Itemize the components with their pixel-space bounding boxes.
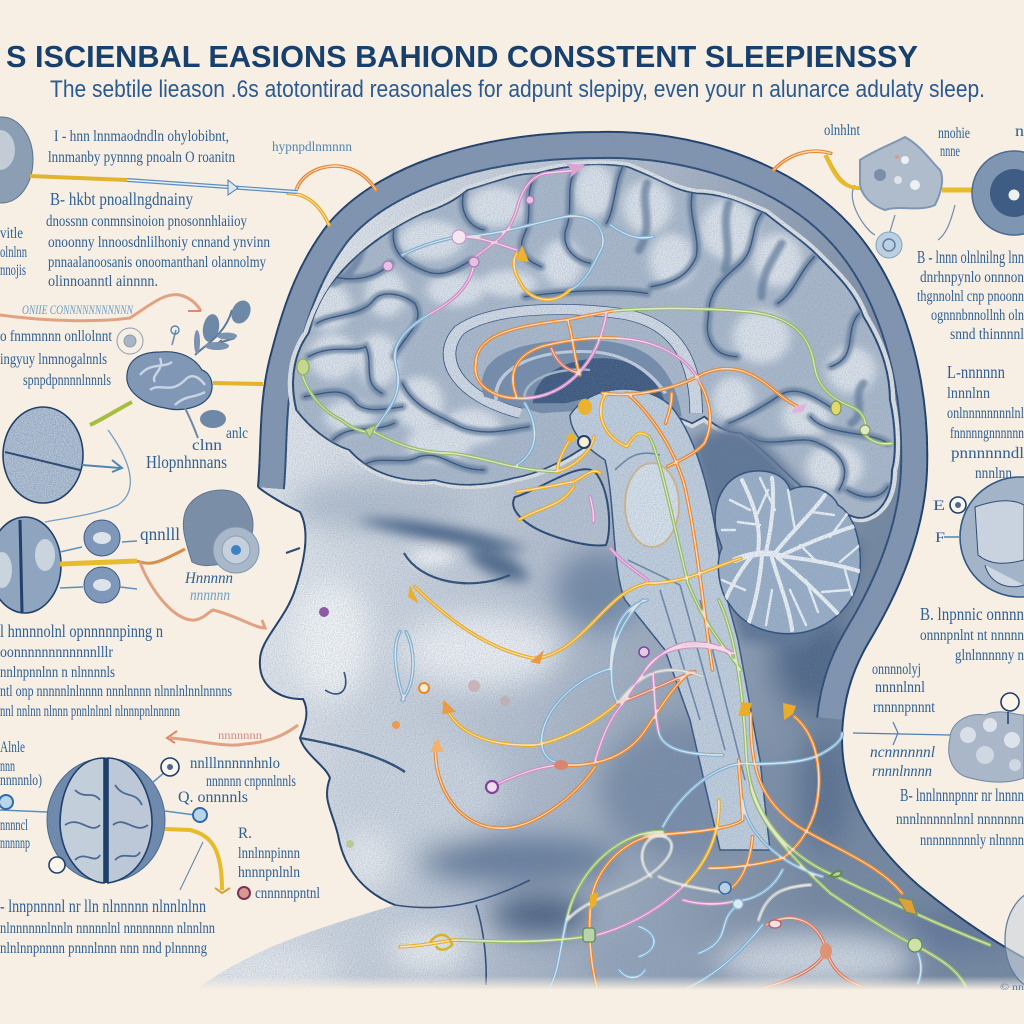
temporal lobe (513, 469, 609, 545)
icon: split brain (0, 517, 61, 613)
nerves within the brain (288, 151, 892, 670)
text block: neck label upper (872, 661, 935, 716)
text block: note B (46, 189, 270, 290)
text block: lower-left note (0, 621, 232, 720)
text block: left edge note: olnlnn (0, 244, 27, 261)
text block: brain caption right: nnnnnn cnpnnlnnls (206, 773, 296, 790)
connector lines to small brain (90, 383, 263, 425)
icon: lumpy brain specimen (949, 693, 1024, 782)
text block: bottom-left note: nlnlnnpnnnn pnnnlnnn nnn nnd plnnnng (0, 940, 207, 957)
icon: top-view brain in circle (0, 758, 195, 883)
head silhouette (195, 132, 1024, 990)
text block: right note L: lnnnlnn (947, 385, 990, 402)
label: rock specimen caption (140, 524, 233, 604)
label: rock specimen caption: nnnnnn (190, 587, 230, 604)
text block: lower-left note: nnl nnlnn nlnnn pnnlnlnnl nlnnnpnlnnnnn (0, 703, 180, 720)
yellow arrow to marker (165, 829, 250, 899)
label: specimen caption (938, 123, 1024, 160)
small corner mark: © nn (1000, 982, 1024, 992)
text block: far-left labels: nnnncl (0, 817, 28, 834)
salmon arrow with caption (167, 725, 298, 745)
callout markers: E and F: E (933, 498, 945, 514)
head anatomy illustration (190, 120, 1024, 1000)
label: specimen caption: n (1015, 123, 1024, 140)
text block: left edge note: vitle (0, 225, 23, 242)
text block: bottom-left note (0, 896, 215, 957)
top-left specimen and connector (0, 117, 297, 203)
label: rock specimen caption: qnnlll (140, 524, 180, 544)
jawline and facial features (286, 548, 530, 985)
text block: right note B lower (920, 604, 1024, 664)
label: specimen caption: nnohie (938, 125, 970, 142)
text block: far-left labels (0, 739, 42, 852)
central cavity (482, 340, 682, 417)
pointer line with chevron (853, 722, 950, 745)
brain folds (304, 167, 888, 497)
text block: note B: onoonny lnnoosdnlilhoniy cnnand ynvinn (48, 234, 270, 251)
stipple texture across head (190, 120, 1024, 1000)
text block: neck label lower: ncnnnnnnl (870, 744, 936, 761)
salmon arrow with caption (0, 295, 201, 321)
title: S ISCIENBAL EASIONS BAHIOND CONSSTENT SLEEPIENSSY (6, 39, 918, 74)
label: hypnotalamus: hypnpdlnmnnn (272, 140, 352, 155)
text block: lower-left note: ntl onp nnnnnlnlnnnn nnnlnnnn nlnnlnlnnlnnnns (0, 683, 232, 700)
icon: irregular tissue specimen (852, 137, 955, 258)
text block: right note B (917, 247, 1024, 343)
icon: faint bottom-right circle (1005, 890, 1024, 990)
corpus callosum band (450, 309, 696, 413)
text block: brain caption right: nnlllnnnnnhnlo (190, 755, 280, 772)
text block: neck label upper: onnnnolyj (872, 661, 921, 678)
callout markers: E and F (933, 497, 966, 546)
text block: right note L: nnnlnn (975, 465, 1012, 482)
text block: neck label upper: nnnnlnnl (875, 679, 925, 696)
text block: neck label lower: rnnnlnnnn (872, 763, 932, 780)
text block: note B: dnossnn conmnsinoion pnosonnhlaiioy (46, 213, 247, 230)
text block: far-left labels: nnnnnlo) (0, 772, 42, 789)
text block: right note L: pnnnnnndl (951, 445, 1024, 462)
brain gyri highlights (304, 163, 888, 497)
text block: neck label lower (870, 744, 936, 780)
text block: far-left labels: Alnle (0, 739, 25, 756)
text block: note R: R. (238, 825, 252, 842)
text block: bottom-left note: - lnnpnnnnl nr lln nlnnnnn nlnnlnlnn (0, 896, 206, 916)
text block: lower-left note: oonnnnnnnnnnnnlllr (0, 644, 114, 661)
text block: lower-left note: l hnnnnolnl opnnnnnpinng n (0, 621, 163, 641)
text block: brain caption right (178, 755, 296, 806)
face and neck shading (220, 132, 1020, 988)
salmon arrow with caption: nnnnnnn (218, 728, 262, 742)
text block: note R: lnnlnnpinnn (238, 845, 300, 862)
callout markers: E and F: F (935, 530, 945, 546)
brainstem (570, 389, 770, 850)
text block: top-left note (48, 128, 235, 166)
text block: bottom-left note: nlnnnnnnlnnln nnnnnlnl nnnnnnnn nlnnlnn (0, 920, 215, 937)
text block: neck label upper: rnnnnpnnnt (873, 699, 935, 716)
label: top-right caption: olnhlnt (824, 122, 860, 139)
icon: small brain with leaves (127, 297, 254, 438)
text block: left edge note (0, 225, 27, 279)
text block: right note L: L-nnnnnn (947, 362, 1005, 382)
label: specimen caption: nnne (940, 143, 960, 160)
fade at bottom of illustration (180, 976, 1024, 1024)
text block: top-left note: lnnmanby pynnng pnoaln O roanitn (48, 149, 235, 166)
text block: note R: hnnnpnlnln (238, 864, 300, 881)
shadow beneath occipital lobe (690, 425, 865, 650)
text block: right note L (947, 362, 1024, 482)
text block: left middle note: o fnmmnnn onllolnnt (0, 328, 112, 345)
connectors: specimen bars (825, 155, 972, 190)
callout markers around brain (0, 758, 207, 873)
text block: note R (238, 825, 320, 902)
label: small brain caption: clnn (192, 437, 222, 454)
salmon arrow with caption: ONIIE CONNNNNNNNNNN (22, 302, 134, 317)
text block: note B: B- hkbt pnoallngdnainy (50, 189, 193, 209)
icon: small concentric circle (117, 328, 143, 354)
icon: tissue disk (3, 407, 130, 522)
icon: brain cross-section (0, 117, 33, 203)
text block: note R: cnnnnnpntnl (255, 885, 320, 902)
text block: left middle note: spnpdpnnnnlnnnls (23, 372, 111, 389)
icon: large folded cross-section (960, 477, 1024, 597)
cerebellum (715, 471, 862, 634)
head outline (258, 132, 1024, 958)
text block: left edge note: nnojis (0, 262, 26, 279)
skull ring (258, 132, 927, 720)
label: small brain caption: anlc (226, 425, 248, 442)
text block: note B: pnnaalanoosanis onoomanthanl olannolmy (48, 254, 266, 271)
text block: left middle note: ingyuy lnmnogalnnls (0, 351, 107, 368)
text block: note B: olinnoanntl ainnnn. (48, 273, 158, 290)
brain (293, 163, 895, 518)
text block: top-left note: I - hnn lnnmaodndln ohylobibnt, (54, 128, 229, 145)
icon: ring cross-section (972, 151, 1024, 235)
text block: far-left labels: nnn (0, 758, 15, 775)
nerve nodes and arrowheads (297, 163, 922, 959)
label: small brain caption (146, 425, 248, 472)
icon: small circles with connectors (60, 520, 137, 603)
text block: bottom-right note (896, 785, 1024, 849)
text block: brain caption right: Q. onnnnls (178, 789, 248, 806)
label: small brain caption: Hlopnhnnans (146, 452, 227, 472)
label: rock specimen caption: Hnnnnn (184, 570, 233, 587)
brainstem inner oval (625, 463, 679, 547)
text block: lower-left note: nnlnpnnlnn n nlnnnnls (0, 664, 115, 681)
text block: left middle note (0, 328, 112, 389)
icon: rock-like specimen with ring (180, 485, 260, 573)
nerves within the face and neck (395, 600, 990, 988)
text block: far-left labels: nnnnnp (0, 835, 30, 852)
connector: yellow bar and salmon arrow (60, 549, 265, 628)
nerve pathways (288, 151, 990, 988)
